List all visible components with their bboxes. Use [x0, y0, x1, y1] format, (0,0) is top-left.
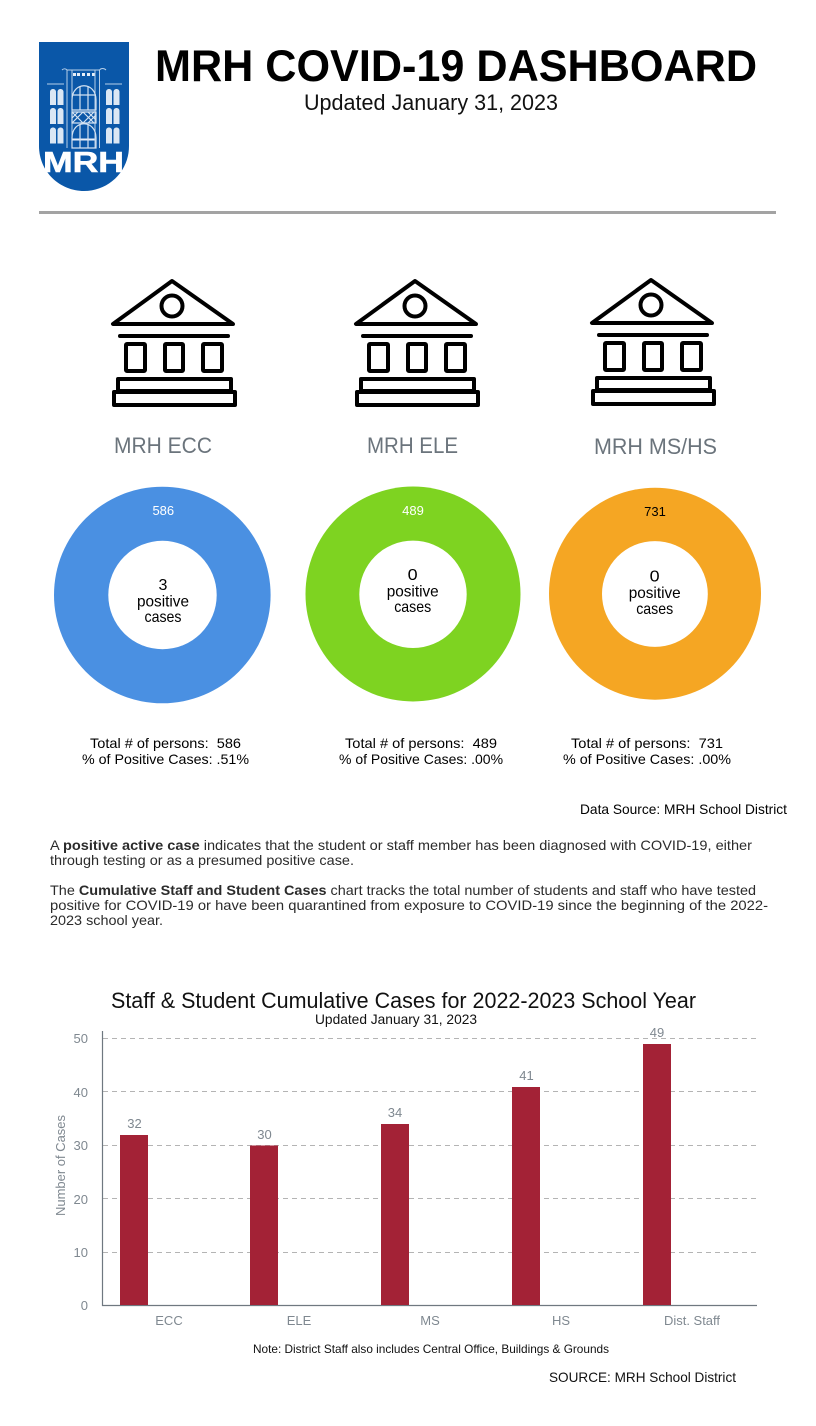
bar chart: cumulative cases: MS	[420, 1313, 440, 1328]
text block: positive active case definition	[50, 837, 752, 868]
title: MRH COVID-19 DASHBOARD	[155, 42, 757, 91]
chart update date: Updated January 31, 2023	[315, 1011, 477, 1027]
heading: MRH MS/HS: MRH MS/HS	[594, 434, 717, 459]
bar chart: cumulative cases: ECC	[155, 1313, 183, 1328]
panel: MRH MS/HS	[549, 280, 761, 767]
text block: positive active case definition: through testing or as a presumed positive case.	[50, 852, 354, 868]
bar chart: cumulative cases: ELE	[287, 1313, 312, 1328]
bar chart: cumulative cases: 10	[74, 1245, 88, 1260]
donut chart: MS/HS: positive	[629, 585, 681, 602]
panel: MRH ELE	[306, 281, 520, 767]
icon: MS/HS building	[592, 280, 714, 404]
stats: MS/HS	[563, 735, 731, 767]
stats: ELE: Total # of persons: 489	[345, 735, 497, 751]
donut chart: ELE	[306, 486, 520, 702]
bar chart: cumulative cases	[54, 1025, 757, 1328]
data source note: Data Source: MRH School District	[580, 801, 787, 817]
bar chart: cumulative cases: 32	[127, 1116, 142, 1131]
heading: MRH ELE: MRH ELE	[367, 433, 458, 458]
donut chart: ECC: 3	[159, 577, 168, 594]
text block: positive active case definition: A positive active case indicates that the student or staff member has been diagnosed with COVID-19, either	[50, 837, 752, 853]
donut chart: ECC	[54, 487, 271, 703]
text block: cumulative chart explanation	[50, 882, 768, 928]
logo: MRH shield: MRH	[43, 147, 124, 179]
bar chart: cumulative cases: Number of Cases	[54, 1115, 68, 1216]
bar chart: cumulative cases: 30	[74, 1138, 88, 1153]
bar chart: cumulative cases: Dist. Staff	[664, 1313, 720, 1328]
heading: MRH ECC: MRH ECC	[114, 433, 212, 458]
stats: ECC: Total # of persons: 586	[90, 735, 241, 751]
text block: cumulative chart explanation: positive for COVID-19 or have been quarantined from exposure to COVID-19 since the beginning of the 2022-	[50, 897, 768, 913]
panel: MRH ECC	[54, 281, 271, 767]
bar chart: cumulative cases: 0	[81, 1298, 88, 1313]
logo: MRH shield	[39, 42, 129, 191]
donut chart: MS/HS	[549, 488, 761, 700]
donut chart: ELE: 489	[402, 503, 424, 518]
stats: ELE: % of Positive Cases: .00%	[339, 751, 503, 767]
bar chart: cumulative cases: 34	[388, 1105, 402, 1120]
donut chart: ECC: positive	[137, 594, 189, 610]
text block: cumulative chart explanation: The Cumulative Staff and Student Cases chart tracks the total number of students and staff who have tested	[50, 882, 756, 898]
bar chart: cumulative cases: 40	[74, 1085, 88, 1100]
donut chart: ELE: positive	[387, 584, 439, 600]
chart heading: Staff & Student Cumulative Cases for 2022-2023 School Year	[111, 988, 696, 1013]
source note: SOURCE: MRH School District	[549, 1369, 736, 1385]
bar chart: cumulative cases: HS	[552, 1313, 570, 1328]
stats: ECC	[82, 735, 249, 767]
update date: Updated January 31, 2023	[304, 90, 558, 115]
donut chart: ECC: 586	[152, 503, 174, 518]
donut chart: MS/HS: cases	[636, 601, 673, 618]
stats: MS/HS: Total # of persons: 731	[571, 735, 723, 751]
donut chart: MS/HS: 0	[650, 568, 660, 586]
donut chart: ELE: cases	[394, 599, 431, 616]
stats: MS/HS: % of Positive Cases: .00%	[563, 751, 731, 767]
donut chart: ECC: cases	[144, 609, 182, 626]
bar chart: cumulative cases: 20	[74, 1192, 88, 1207]
text block: cumulative chart explanation: 2023 school year.	[50, 912, 163, 928]
stats: ECC: % of Positive Cases: .51%	[82, 751, 249, 767]
bar chart: cumulative cases: 50	[74, 1031, 88, 1046]
bar chart: cumulative cases: 30	[257, 1127, 272, 1142]
donut chart: ELE: 0	[408, 567, 418, 584]
donut chart: MS/HS: 731	[644, 504, 666, 519]
chart footnote: Note: District Staff also includes Central Office, Buildings & Grounds	[253, 1342, 609, 1356]
icon: ELE building	[356, 281, 478, 405]
bar chart: cumulative cases: 41	[519, 1068, 534, 1083]
stats: ELE	[339, 735, 503, 767]
icon: ECC building	[113, 281, 235, 405]
bar chart: cumulative cases: 49	[650, 1025, 664, 1040]
